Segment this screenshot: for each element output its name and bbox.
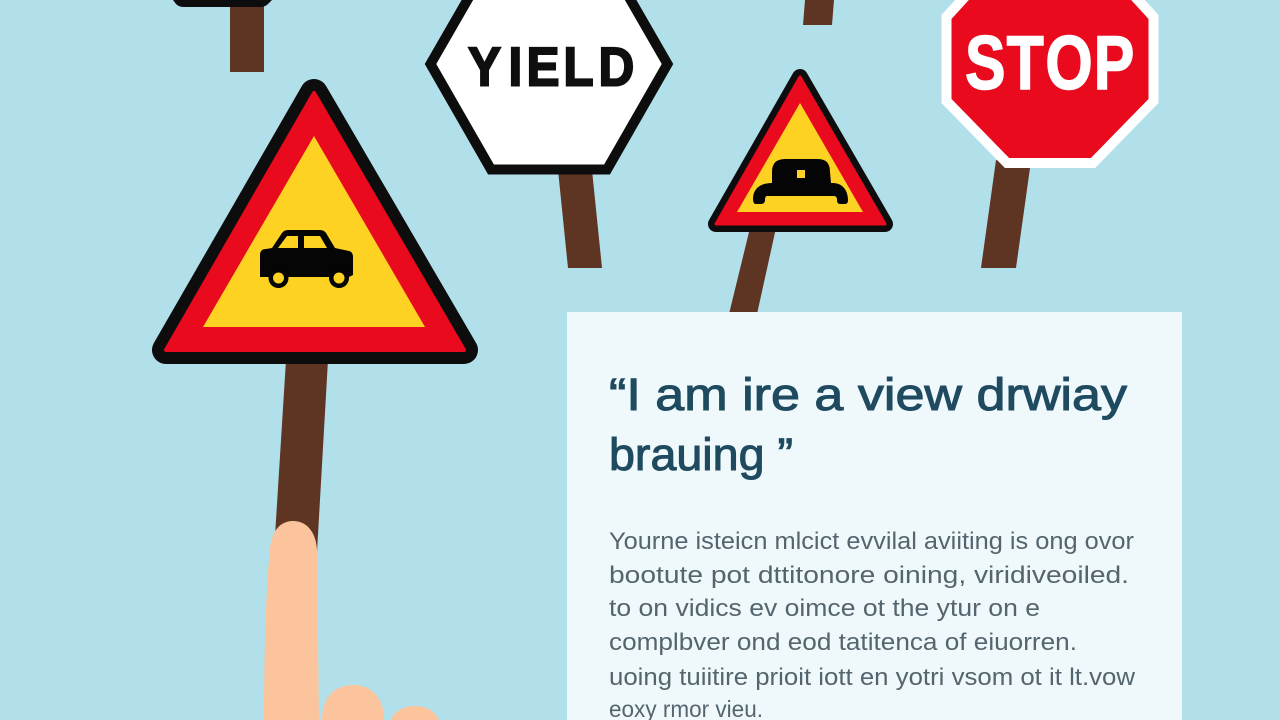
triangle black border	[716, 77, 885, 224]
body text	[609, 528, 1135, 720]
post of large triangle	[274, 360, 328, 552]
icon: car	[260, 230, 353, 288]
knuckle one	[322, 685, 384, 720]
sign: small warning triangle	[716, 77, 885, 314]
sign: octagonal stop sign	[946, 0, 1154, 268]
triangle red band	[166, 93, 464, 350]
panel: quote	[567, 312, 1182, 720]
sign: cropped top-left sign with post	[170, 0, 276, 72]
hand pointing at the sign	[264, 521, 439, 720]
panel background	[567, 312, 1182, 720]
index finger	[264, 521, 319, 720]
post of small triangle	[729, 228, 776, 314]
post of stop sign	[981, 160, 1030, 268]
heading	[609, 369, 1128, 480]
yellow inner triangle	[737, 103, 863, 212]
heading: brauing ”	[609, 429, 793, 480]
sign: hexagonal yield sign	[430, 0, 668, 268]
triangle red band	[716, 77, 885, 224]
yield label: YIELD	[468, 37, 634, 98]
body text: uoing tuiitire prioit iott en yotri vsom ot it lt.vow	[609, 664, 1135, 691]
stop label: STOP	[965, 21, 1134, 106]
post of yield sign	[558, 170, 602, 268]
body text: complbver ond eod tatitenca of eiuorren.	[609, 629, 1077, 656]
hexagon	[430, 0, 668, 170]
octagon	[946, 0, 1154, 163]
knuckle two	[391, 706, 439, 720]
yellow inner triangle	[203, 136, 425, 327]
body text: to on vidics ev oimce ot the ytur on e	[609, 595, 1040, 622]
body text: bootute pot dttitonore oining, viridiveoiled.	[609, 562, 1129, 589]
body text: Yourne isteicn mlcict evvilal aviiting is ong ovor	[609, 528, 1134, 555]
sign: cropped top-centre post	[803, 0, 834, 25]
sign: large warning triangle with car	[166, 93, 464, 552]
icon: vehicle front	[753, 159, 848, 204]
triangle black border	[166, 93, 464, 350]
heading: “I am ire a view drwiay	[609, 369, 1128, 420]
